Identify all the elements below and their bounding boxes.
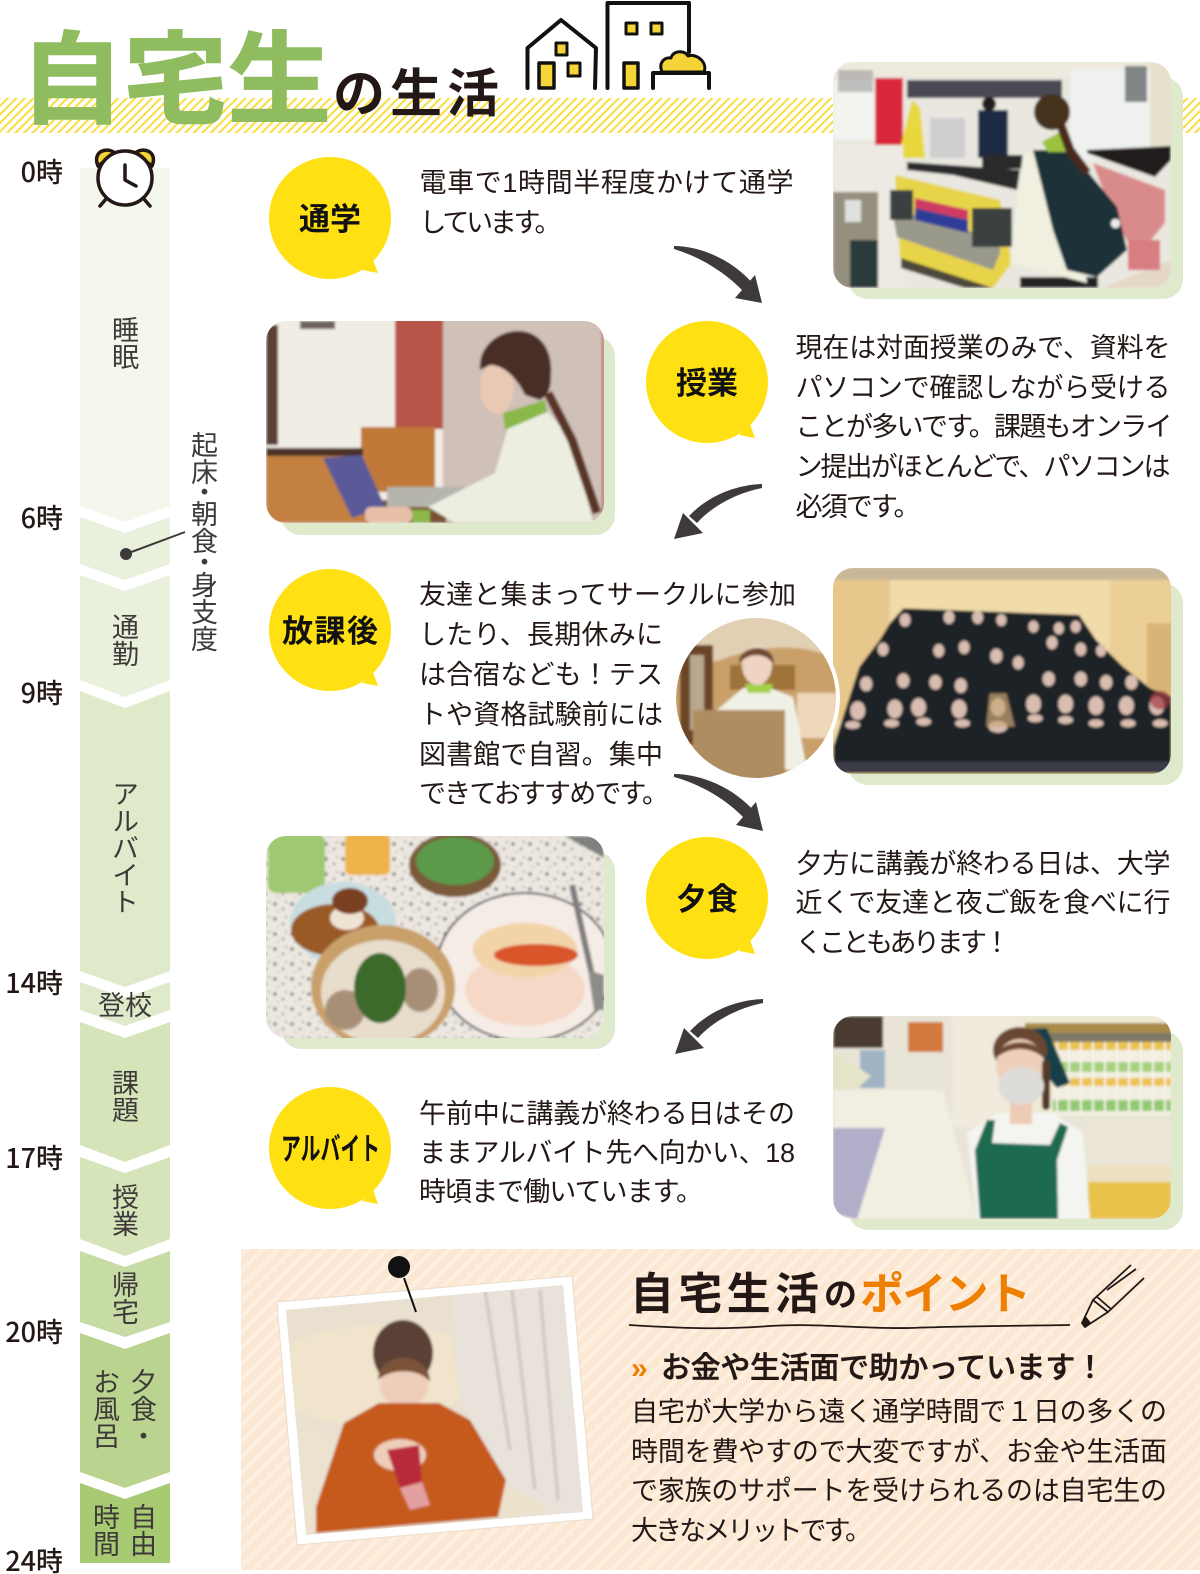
text: commute: 電車で1時間半程度かけて通学: [420, 168, 794, 198]
photo: dinner dishes: [264, 833, 615, 1049]
bubble: class: [646, 321, 768, 443]
arrow: to class: [674, 246, 762, 303]
segment: free time: [80, 1483, 170, 1563]
heading: point: ポイント: [860, 1270, 1031, 1319]
icon: alarm clock: [97, 150, 153, 206]
text: class: パソコンで確認しながら受ける: [796, 373, 1170, 403]
segment: sleep: [80, 168, 170, 522]
text: commute: [420, 168, 794, 238]
icon: pencil: [1082, 1265, 1144, 1327]
wavy underline: [629, 1325, 1070, 1328]
title: の生活: [333, 66, 499, 124]
bubble: part-time job: [269, 1087, 391, 1209]
timeline labels: 自由: [126, 1503, 156, 1557]
text: dinner: くこともあります！: [796, 928, 1010, 958]
segment: return home: [80, 1251, 170, 1337]
timeline labels: 授業: [108, 1183, 138, 1237]
segment: class: [80, 1157, 170, 1256]
text: after school: は合宿なども！テス: [419, 660, 663, 690]
timeline labels: 睡眠: [108, 316, 138, 370]
hour labels: 6時: [21, 497, 63, 536]
wake-up callout: ・: [187, 548, 217, 575]
text: point: 自宅が大学から遠く通学時間で１日の多くの: [631, 1397, 1167, 1427]
text: class: 現在は対面授業のみで、資料を: [796, 333, 1170, 363]
wake-up callout: 身支度: [187, 571, 218, 652]
photo: studying in library: [676, 618, 840, 778]
arrow: to dinner: [674, 774, 763, 831]
text: dinner: 近くで友達と夜ご飯を食べに行: [796, 888, 1170, 918]
segment: assignments: [80, 1022, 170, 1162]
text: part-time job: ままアルバイト先へ向かい、18: [419, 1138, 795, 1168]
yellow hatched band: [0, 98, 1200, 133]
timeline labels: [89, 316, 156, 1557]
text: class: ン提出がほとんどで、パソコンは: [796, 452, 1170, 482]
wake-up callout: [120, 431, 218, 652]
pin: [388, 1256, 416, 1312]
text: point: 大きなメリットです。: [631, 1516, 872, 1546]
timeline labels: 通勤: [108, 613, 138, 667]
bubble: dinner: [646, 837, 768, 959]
icon: houses: [528, 3, 709, 88]
hour labels: 0時: [21, 151, 63, 190]
wake-up callout: ・: [187, 478, 217, 505]
text: dinner: [796, 849, 1170, 958]
text: point: 時間を費やすので大変ですが、お金や生活面: [631, 1437, 1167, 1467]
text: after school: できておすすめです。: [419, 779, 669, 809]
wake-up callout: 起床: [187, 431, 218, 485]
segment: dinner and bath: [80, 1333, 170, 1488]
text: after school: 友達と集まってサークルに参加: [419, 580, 796, 610]
text: class: 必須です。: [796, 492, 920, 522]
bubble: commute: 通学: [299, 202, 361, 237]
text: part-time job: [419, 1099, 795, 1207]
text: class: ことが多いです。課題もオンライ: [796, 412, 1172, 442]
photo: online class at home: [264, 319, 615, 535]
segment: part-time: [80, 691, 170, 987]
hour labels: [5, 151, 63, 1574]
timeline labels: お風呂: [89, 1368, 120, 1449]
text: dinner: 夕方に講義が終わる日は、大学: [796, 849, 1170, 879]
text: part-time job: 時頃まで働いています。: [419, 1177, 703, 1207]
bubble: part-time job: アルバイト: [281, 1132, 380, 1167]
timeline labels: 登校: [98, 991, 152, 1021]
timeline bar: [80, 168, 170, 1563]
timeline labels: アルバイト: [108, 780, 138, 915]
subheading: »: [631, 1352, 648, 1385]
segment: morning: [80, 517, 170, 580]
hour labels: 14時: [5, 962, 63, 1001]
timeline labels: 時間: [89, 1503, 119, 1557]
wake-up callout: 朝食: [187, 500, 218, 554]
text: after school: [419, 580, 796, 809]
timeline labels: 課題: [108, 1069, 138, 1123]
subheading: お金や生活面で助かっています！: [661, 1352, 1105, 1385]
timeline labels: 夕食・: [126, 1368, 156, 1449]
text: after school: したり、長期休みに: [419, 620, 663, 650]
panel: point: [241, 1249, 1200, 1570]
photo: polaroid knitting: [277, 1276, 593, 1545]
text: class: [796, 333, 1172, 522]
heading: point: の: [824, 1276, 857, 1313]
hour labels: 20時: [5, 1311, 63, 1350]
hour labels: 9時: [21, 672, 63, 711]
text: point: で家族のサポートを受けられるのは自宅生の: [631, 1476, 1167, 1506]
timeline labels: 帰宅: [108, 1271, 138, 1325]
segment: commute: [80, 575, 170, 697]
heading: point: [630, 1270, 1031, 1319]
text: part-time job: 午前中に講義が終わる日はその: [419, 1099, 795, 1129]
segment: to school: [80, 982, 170, 1026]
title: [20, 25, 499, 137]
photo: part-time cashier: [830, 1014, 1183, 1230]
bubble: after school: 放課後: [282, 614, 378, 649]
arrow: to part-time job: [675, 999, 763, 1054]
text: commute: しています。: [420, 208, 562, 238]
photo: station ticket gate: [830, 60, 1183, 299]
text: after school: トや資格試験前には: [419, 700, 663, 730]
text: after school: 図書館で自習。集中: [419, 740, 663, 770]
photo: circle group: [829, 567, 1183, 785]
bubble: dinner: 夕食: [676, 882, 738, 917]
bubble: class: 授業: [676, 366, 738, 401]
bubble: after school: [269, 569, 391, 691]
text: point: [631, 1397, 1167, 1546]
bubble: commute: [269, 157, 391, 279]
heading: point: 自宅生活: [630, 1270, 819, 1319]
arrow: to after school: [674, 484, 762, 539]
hour labels: 17時: [5, 1137, 63, 1176]
title: 自宅生: [20, 25, 331, 137]
